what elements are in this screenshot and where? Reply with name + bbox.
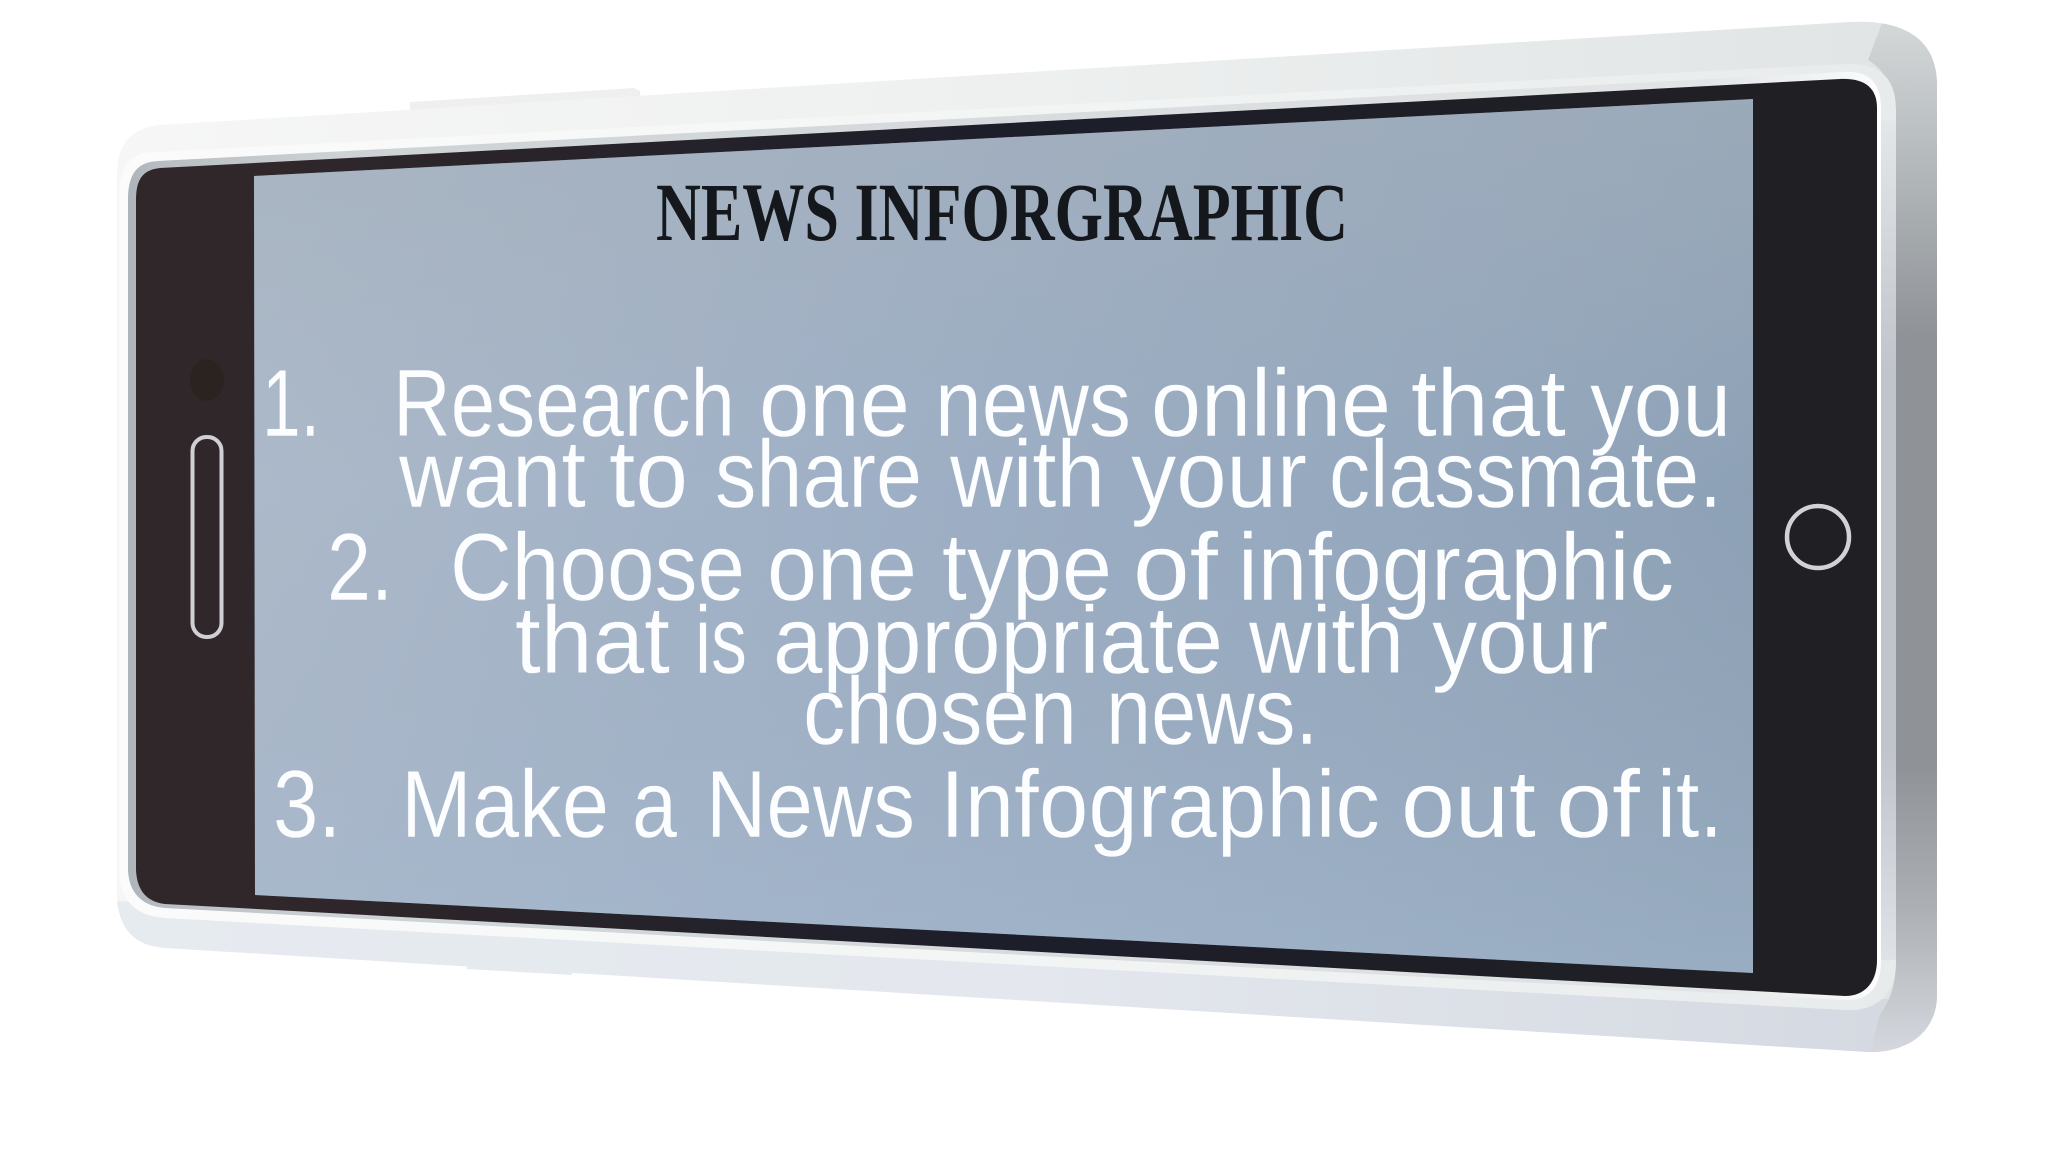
step 3 text: of [1556,751,1640,858]
step 3 text: Infographic [940,751,1380,858]
title: NEWS INFORGRAPHIC [656,166,1348,258]
step 2 text: news. [1106,658,1318,765]
step 3 text: out [1401,751,1536,858]
icon: home button [1787,506,1849,568]
step 3 text [273,751,1723,858]
step 2 text: type [942,514,1112,621]
bottom side button [467,962,572,975]
step 2 text: that [515,587,670,694]
step 2 text: your [1432,587,1608,694]
screen bezel lip [128,72,1881,1000]
step 1 text: to [609,421,688,528]
step 2 text: with [1248,587,1404,694]
step 1 text [262,350,1731,528]
step 2 text: 2. [327,514,393,621]
icon: front camera [190,359,224,401]
screen panel [254,99,1753,973]
right bezel band [1881,120,1896,960]
step 2 text: of [1133,514,1218,621]
step 1 text: that [1411,350,1566,457]
top side button [410,88,640,116]
step 2 text: appropriate [773,587,1223,694]
step 1 text: with [949,421,1105,528]
step 1 text: share [715,421,922,528]
icon: speaker slot [192,437,222,637]
step 2 text: is [695,587,747,694]
step 2 text: one [767,514,917,621]
step 1 text: want [398,421,586,528]
step 1 text: you [1590,350,1731,457]
step 1 text: one [759,350,910,457]
step 1 text: your [1131,421,1307,528]
black glass front [136,79,1877,996]
step 3 text: 3. [273,751,341,858]
step 2 text: Choose [450,514,745,621]
step 1 text: online [1151,350,1391,457]
step 3 text: it. [1657,751,1723,858]
step 1 text: 1. [262,350,320,457]
infographic: phone with news instructions [117,22,1937,1052]
step 1 text: classmate. [1329,421,1722,528]
step 1 text: Research [393,350,735,457]
bezel outer rim [119,64,1896,1010]
step 3 text: a [632,751,678,858]
step 2 text: infographic [1238,514,1674,621]
step 2 text [327,514,1674,765]
step 2 text: chosen [803,658,1077,765]
step 3 text: Make [401,751,609,858]
step 1 text: news [935,350,1131,457]
step 3 text: News [706,751,915,858]
